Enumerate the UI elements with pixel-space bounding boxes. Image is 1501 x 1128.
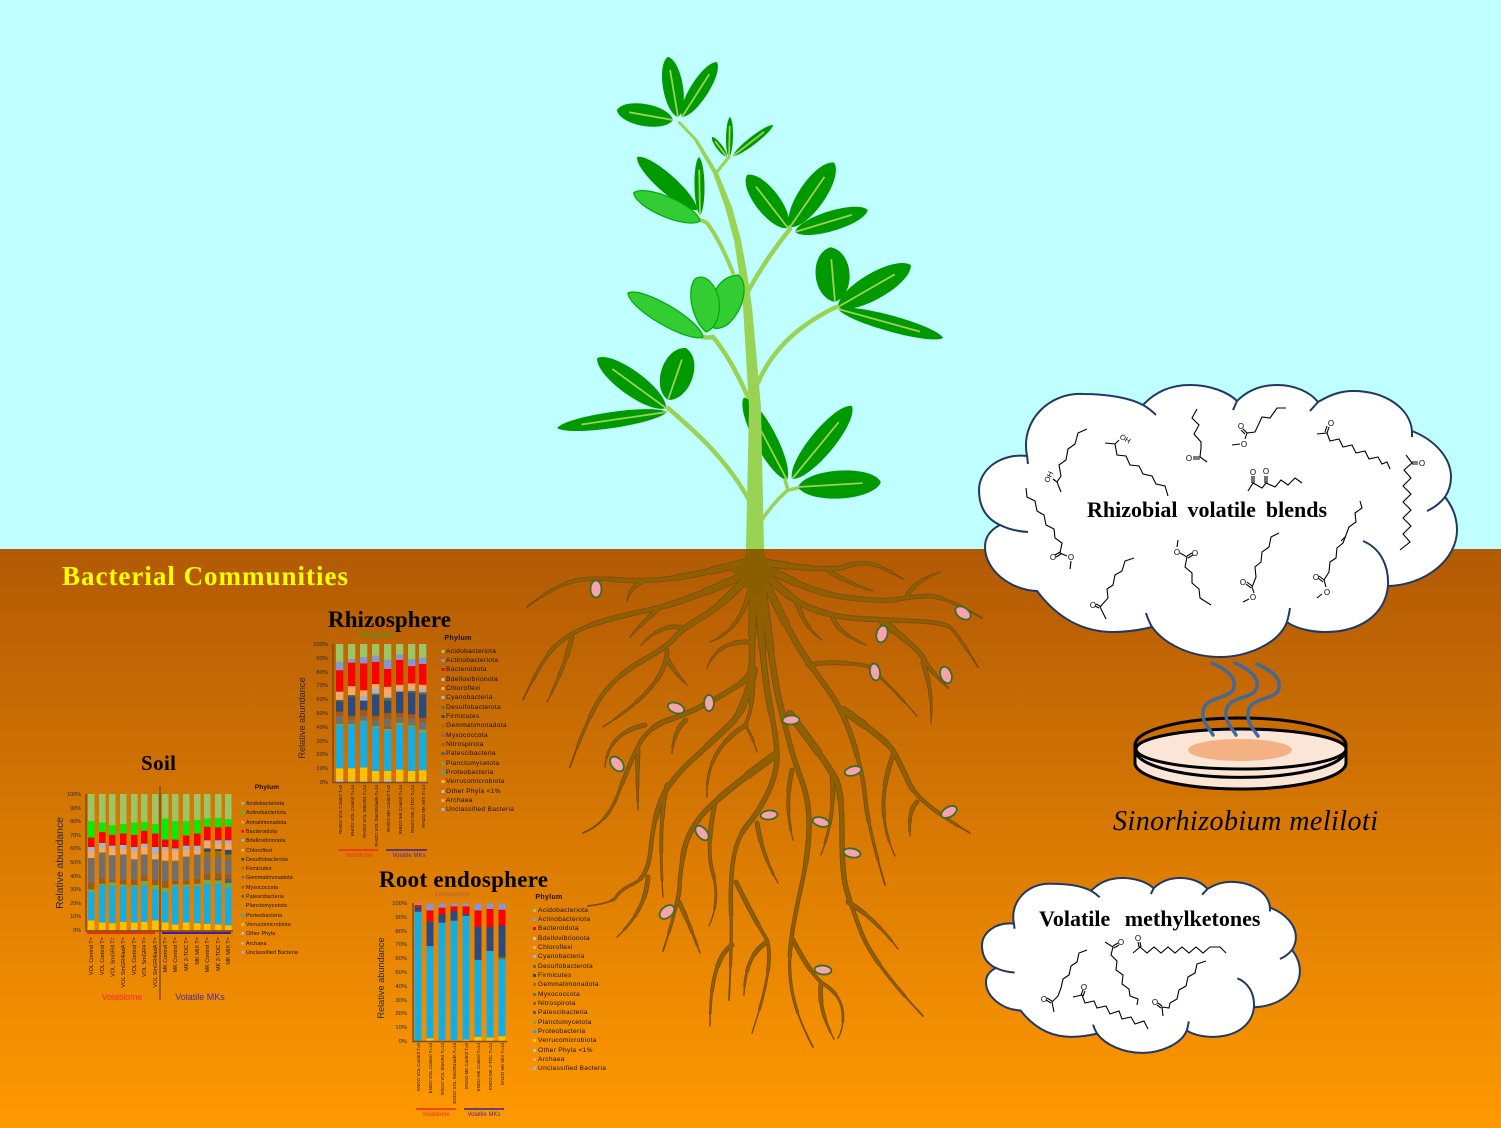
soil legend: Acidobacteriota <box>246 801 284 807</box>
lower right leaf cluster <box>783 398 882 501</box>
stem and branches <box>668 121 836 549</box>
sky background <box>0 0 1501 549</box>
rhizosphere chart subtitle: Rhizosphere <box>359 633 396 639</box>
soil x axis labels: MK Control T= <box>173 937 179 973</box>
soil y axis ticks: 30% <box>70 887 81 893</box>
volatile molecule structures: O <box>1419 459 1425 468</box>
dish lid rim <box>1135 718 1346 745</box>
heading: root endosphere: Root endosphere <box>379 867 548 892</box>
rhizosphere y axis ticks: 60% <box>316 697 328 703</box>
volatile molecule structures: O <box>1068 553 1074 562</box>
soil x axis labels: VOL Control T= <box>100 937 106 975</box>
soil y axis ticks: 90% <box>70 806 81 812</box>
upper right leaf cluster <box>738 155 871 242</box>
rhizosphere legend: Bacteroidota <box>446 666 487 673</box>
soil legend: Chloroflexi <box>246 848 272 854</box>
petri dish <box>1135 718 1346 789</box>
endosphere legend: Chloroflexi <box>538 944 573 951</box>
endosphere chart subtitle: Endosphere <box>435 892 470 898</box>
endosphere y axis ticks: 40% <box>395 984 407 990</box>
soil group brackets <box>87 932 155 934</box>
soil legend: Myxococcota <box>246 885 278 891</box>
endosphere group label: volatilome: Volatilome <box>422 1112 451 1118</box>
endosphere legend: Desulfobacterota <box>538 963 593 970</box>
methylketone molecule structures <box>1041 934 1226 1029</box>
chart: rhizosphere <box>297 607 514 859</box>
rhizosphere y axis ticks: 90% <box>316 656 328 662</box>
endosphere y axis ticks: 80% <box>395 929 407 935</box>
endosphere legend: Myxococcota <box>538 991 580 998</box>
endosphere x axis labels <box>416 1043 505 1104</box>
rhizosphere group label: volatilome: Volatilome <box>345 853 374 859</box>
volatile molecule structures: O <box>1324 588 1330 597</box>
endosphere x axis labels: ENDO VOL Control T=0 <box>416 1043 421 1091</box>
leaf behind stem <box>734 393 797 485</box>
rhizosphere axes <box>333 644 428 782</box>
endosphere y axis ticks: 90% <box>395 915 407 921</box>
rhizosphere legend: Unclassified Bacteria <box>446 806 514 813</box>
rhizosphere y axis ticks: 100% <box>313 642 328 648</box>
rhizosphere legend: Phylum <box>444 635 472 642</box>
endosphere y axis ticks: 70% <box>395 942 407 948</box>
soil x axis labels: VOL SmGR4ladA T= <box>121 937 127 988</box>
volatile molecule structures: O <box>1250 468 1256 477</box>
volatile molecule structures: O <box>1050 553 1056 562</box>
rhizosphere group label: volatile MKs: Volatile MKs <box>392 853 426 859</box>
soil y axis ticks: 0% <box>73 928 81 934</box>
soil legend: Planctomycetota <box>246 903 287 909</box>
middle right leaf cluster <box>813 246 945 346</box>
endosphere y axis ticks: 50% <box>395 970 407 976</box>
rhizosphere x axis labels: RHIZO MK Control T=0 <box>386 785 391 832</box>
label: Sinorhizobium meliloti: Sinorhizobium meliloti <box>1113 806 1378 837</box>
soil legend: Phylum <box>255 784 279 791</box>
endosphere x axis labels: ENDO MK 2-TDC T=14 <box>488 1043 493 1090</box>
heading: rhizobial volatile blends: Rhizobial volatile blends <box>1087 497 1327 522</box>
heading: rhizosphere: Rhizosphere <box>328 607 451 632</box>
endosphere legend: Bacteroidota <box>538 925 579 932</box>
soil legend: Patescibacteria <box>246 894 284 900</box>
endosphere x axis labels: ENDO MK Control T=0 <box>464 1043 469 1089</box>
soil legend: Firmicutes <box>246 866 272 872</box>
volatile molecule structures: O <box>1090 601 1096 610</box>
soil legend: Bdellovibrionota <box>246 838 286 844</box>
root system <box>523 549 982 1047</box>
soil y axis ticks: 60% <box>70 846 81 852</box>
heading: bacterial communities: Bacterial Communities <box>62 561 348 591</box>
volatile molecule structures: O <box>1192 549 1198 558</box>
rhizosphere x axis labels: RHIZO VOL Control T=14 <box>350 785 355 836</box>
endosphere axes <box>413 903 507 1042</box>
dish middle rim <box>1136 753 1345 777</box>
soil axes <box>86 786 233 1000</box>
soil y axis ticks: 40% <box>70 874 81 880</box>
soil group label: volatilome: Volatilome <box>102 992 142 1002</box>
soil x axis labels: VOL SmGR4 T= <box>110 937 116 977</box>
endosphere legend: Archaea <box>538 1056 565 1063</box>
soil legend: Other Phyla <box>246 931 275 937</box>
rhizosphere x axis labels: RHIZO VOL SmGR4 T=14 <box>362 785 367 838</box>
endosphere y axis ticks: 20% <box>395 1011 407 1017</box>
rhizosphere y axis ticks: 10% <box>316 766 328 772</box>
rhizosphere legend: Planctomycetota <box>446 760 500 767</box>
volatile molecule structures: O <box>1241 440 1247 449</box>
endosphere legend: Gemmatimonadota <box>538 981 599 988</box>
endosphere legend: Acidobacteriota <box>538 907 588 914</box>
endosphere x axis labels: ENDO VOL SmGR4ladA T=14 <box>452 1043 457 1104</box>
rhizosphere x axis labels: RHIZO VOL Control T=0 <box>338 785 343 834</box>
soil background <box>0 549 1501 1128</box>
rhizosphere legend: Proteobacteria <box>446 769 493 776</box>
endosphere x axis labels: ENDO VOL Control T=14 <box>428 1043 433 1093</box>
soil x axis labels: MK 2-TDC T= <box>184 937 190 971</box>
rhizosphere y axis ticks <box>313 642 328 786</box>
soil y axis ticks <box>67 792 81 934</box>
rhizosphere legend: Other Phyla <1% <box>446 788 501 795</box>
soil x axis labels: MK MIX T= <box>226 937 232 965</box>
rhizosphere x axis labels <box>338 785 426 847</box>
volatile molecule structures: O <box>1328 419 1334 428</box>
methylketone molecule structures: O <box>1081 983 1087 992</box>
rhizosphere legend: Myxococcota <box>446 732 488 739</box>
methylketone molecule structures: O <box>1135 934 1141 943</box>
endosphere legend: Other Phyla <1% <box>538 1047 593 1054</box>
volatile molecule structures: O <box>1238 422 1244 431</box>
cloud: rhizobial volatile blends <box>979 385 1457 657</box>
soil group label: volatile MKs: Volatile MKs <box>175 992 225 1002</box>
middle light leaf cluster <box>623 275 744 346</box>
rhizosphere y axis ticks: 0% <box>320 780 328 786</box>
volatile molecule structures <box>1026 408 1425 619</box>
upper left leaf cluster <box>630 150 705 230</box>
rhizosphere y axis ticks: 50% <box>316 711 328 717</box>
methylketone molecule structures: O <box>1041 995 1047 1004</box>
soil x axis labels <box>89 937 232 988</box>
soil x axis labels: MK Control T= <box>163 937 169 973</box>
endosphere y axis ticks: 100% <box>392 901 407 907</box>
rhizosphere x axis labels: RHIZO VOL SmGR4ladA T=14 <box>374 785 379 847</box>
root nodules <box>590 580 973 975</box>
soil x axis labels: MK 2-TDC T= <box>216 937 222 971</box>
rhizosphere y axis ticks: 40% <box>316 725 328 731</box>
rhizosphere legend: Patescibacteria <box>446 750 496 757</box>
soil legend: Armatimonadota <box>246 820 287 826</box>
endosphere y axis ticks: 0% <box>399 1039 407 1045</box>
soil y axis ticks: 70% <box>70 833 81 839</box>
soil x axis labels: MK Control T= <box>205 937 211 973</box>
chart: root endosphere <box>376 867 606 1118</box>
rhizosphere stacked bars <box>336 644 426 782</box>
endosphere legend: Phylum <box>535 894 563 901</box>
soil legend: Verrucomicrobiota <box>246 922 291 928</box>
rhizosphere legend: Bdellovibrionota <box>446 676 498 683</box>
soil legend <box>242 784 298 956</box>
agar surface <box>1136 729 1346 769</box>
rhizosphere y axis ticks: 30% <box>316 739 328 745</box>
rhizosphere legend: Verrucomicrobiota <box>446 778 505 785</box>
volatile molecule structures: OH <box>1042 470 1055 484</box>
rhizosphere legend: Gemmatimonadota <box>446 722 507 729</box>
top leaf cluster <box>615 55 724 131</box>
endosphere legend: Bdellovibrionota <box>538 935 590 942</box>
chart: soil <box>55 751 298 1002</box>
rhizosphere legend: Archaea <box>446 797 473 804</box>
soil y axis label: Relative abundance <box>55 817 66 909</box>
soil legend: Archaea <box>246 941 267 947</box>
small young leaf cluster <box>710 117 775 159</box>
volatile molecule structures: O <box>1174 548 1180 557</box>
cloud: volatile methylketones <box>982 878 1300 1053</box>
endosphere y axis ticks: 10% <box>395 1025 407 1031</box>
rhizosphere legend: Cyanobacteria <box>446 694 493 701</box>
soil legend: Unclassified Bacteria <box>246 950 298 956</box>
endosphere legend: Actinobacteriota <box>538 916 590 923</box>
cloud outline small <box>982 878 1300 1053</box>
endosphere legend: Cyanobacteria <box>538 953 585 960</box>
rhizosphere legend: Desulfobacterota <box>446 704 501 711</box>
endosphere legend: Proteobacteria <box>538 1028 585 1035</box>
volatile vapour arrows <box>1203 663 1279 736</box>
soil stacked bars <box>88 794 232 930</box>
soil legend: Desulfobacterota <box>246 857 288 863</box>
endosphere y axis label: Relative abundance <box>376 937 386 1019</box>
soil legend: Bacteroidota <box>246 829 277 835</box>
lower left leaf cluster <box>556 343 701 436</box>
volatile molecule structures: O <box>1263 467 1269 476</box>
soil y axis ticks: 10% <box>70 914 81 920</box>
endosphere y axis ticks: 60% <box>395 956 407 962</box>
cloud outline <box>979 385 1457 657</box>
rhizosphere legend: Acidobacteriota <box>446 648 496 655</box>
volatile molecule structures: O <box>1186 454 1192 463</box>
soil x axis labels: VOL SmGR4 T= <box>142 937 148 977</box>
rhizosphere y axis label: Relative abundance <box>297 677 307 759</box>
bacterial colony <box>1188 739 1292 761</box>
endosphere legend: Unclassified Bacteria <box>538 1065 606 1072</box>
volatile molecule structures: OH <box>1118 432 1132 446</box>
endosphere legend: Nitrospirota <box>538 1000 576 1007</box>
heading: soil: Soil <box>141 751 176 775</box>
endosphere y axis ticks <box>392 901 407 1045</box>
methylketone molecule structures: O <box>1152 998 1158 1007</box>
endosphere x axis labels: ENDO MK Control T=14 <box>476 1043 481 1091</box>
soil y axis ticks: 20% <box>70 901 81 907</box>
rhizosphere legend: Nitrospirota <box>446 741 484 748</box>
soil legend: Actinobacteriota <box>246 810 286 816</box>
rhizosphere legend: Firmicutes <box>446 713 480 720</box>
heading: volatile methylketones: Volatile methylketones <box>1039 906 1261 931</box>
endosphere y axis ticks: 30% <box>395 998 407 1004</box>
endosphere group label: volatile MKs: Volatile MKs <box>467 1112 501 1118</box>
soil x axis labels: VOL SmGR4ladA T= <box>153 937 159 988</box>
volatile molecule structures: O <box>1240 578 1246 587</box>
endosphere legend: Verrucomicrobiota <box>538 1037 597 1044</box>
endosphere legend: Patescibacteria <box>538 1009 588 1016</box>
dish base <box>1135 745 1346 789</box>
rhizosphere legend <box>442 635 514 813</box>
methylketone molecule structures: O <box>1118 938 1124 947</box>
rhizosphere y axis ticks: 80% <box>316 670 328 676</box>
volatile molecule structures: O <box>1250 593 1256 602</box>
endosphere legend <box>533 894 606 1072</box>
soil x axis labels: VOL Control T= <box>89 937 95 975</box>
rhizosphere x axis labels: RHIZO MK 2-TDC T=14 <box>410 785 415 833</box>
endosphere legend: Firmicutes <box>538 972 572 979</box>
endosphere x axis labels: ENDO MK MIX T=14 <box>500 1043 505 1085</box>
rhizosphere group brackets <box>338 849 378 851</box>
soil x axis labels: MK MIX T= <box>195 937 201 965</box>
rhizosphere legend: Chloroflexi <box>446 685 481 692</box>
volatile molecule structures: O <box>1313 573 1319 582</box>
endosphere legend: Planctomycetota <box>538 1019 592 1026</box>
soil y axis ticks: 80% <box>70 819 81 825</box>
rhizosphere x axis labels: RHIZO MK MIX T=14 <box>421 785 426 828</box>
endosphere stacked bars <box>414 904 506 1041</box>
plant shoot <box>556 55 945 549</box>
soil y axis ticks: 100% <box>67 792 81 798</box>
endosphere x axis labels: ENDO VOL SmGR4 T=14 <box>440 1043 445 1095</box>
soil legend: Gemmatimonadota <box>246 875 293 881</box>
endosphere group brackets <box>416 1108 456 1110</box>
rhizosphere y axis ticks: 70% <box>316 683 328 689</box>
soil y axis ticks: 50% <box>70 860 81 866</box>
soil legend: Proteobacteria <box>246 913 282 919</box>
rhizosphere legend: Actinobacteriota <box>446 657 498 664</box>
soil x axis labels: VOL Control T= <box>132 937 138 975</box>
rhizosphere x axis labels: RHIZO MK Control T=14 <box>398 785 403 834</box>
rhizosphere y axis ticks: 20% <box>316 752 328 758</box>
